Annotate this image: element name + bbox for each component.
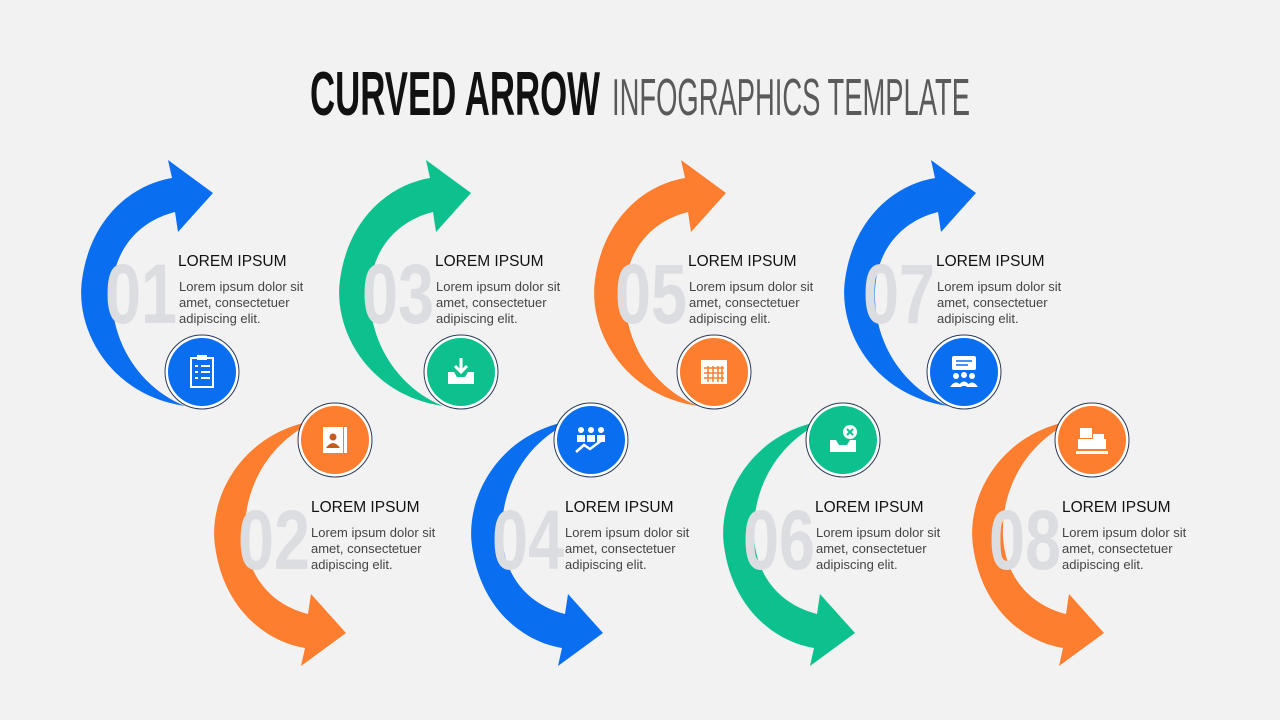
step 08 text (989, 493, 1187, 587)
icon 04: team growth (554, 403, 628, 477)
step 06 text: amet, consectetuer (816, 541, 927, 556)
step 01 text: adipiscing elit. (179, 311, 261, 326)
step 02 text: 02 (238, 493, 310, 587)
step 03 text: 03 (362, 247, 434, 341)
step 08 text: 08 (989, 493, 1061, 587)
icon 03: download tray (424, 335, 498, 409)
arrow 02 (214, 420, 346, 666)
step 01 text (105, 247, 304, 341)
step 08 text: amet, consectetuer (1062, 541, 1173, 556)
step 08 text: LOREM IPSUM (1062, 499, 1171, 516)
icon 08: cash register (1055, 403, 1129, 477)
arrow 07 (844, 160, 976, 406)
step 01 text: amet, consectetuer (179, 295, 290, 310)
step 03 text: Lorem ipsum dolor sit (436, 279, 561, 294)
icon 01: clipboard (165, 335, 239, 409)
step 06 text: LOREM IPSUM (815, 499, 924, 516)
step 02 text: amet, consectetuer (311, 541, 422, 556)
step 04 text: LOREM IPSUM (565, 499, 674, 516)
icon 02: contact book (298, 403, 372, 477)
step 04 text (492, 493, 690, 587)
step 03 text (362, 247, 561, 341)
step 02 text: Lorem ipsum dolor sit (311, 525, 436, 540)
step 02 text (238, 493, 436, 587)
arrow 08 (972, 420, 1104, 666)
step 06 text: adipiscing elit. (816, 557, 898, 572)
arrow 04 (471, 420, 603, 666)
icon 06: inbox cancel (806, 403, 880, 477)
step 05 text: adipiscing elit. (689, 311, 771, 326)
step 03 text: adipiscing elit. (436, 311, 518, 326)
step 05 text: Lorem ipsum dolor sit (689, 279, 814, 294)
step 03 text: amet, consectetuer (436, 295, 547, 310)
step 04 text: amet, consectetuer (565, 541, 676, 556)
step 01 text: Lorem ipsum dolor sit (179, 279, 304, 294)
step 05 text: LOREM IPSUM (688, 253, 797, 270)
arrow 03 (339, 160, 471, 406)
icon 07: meeting (927, 335, 1001, 409)
step 04 text: adipiscing elit. (565, 557, 647, 572)
step 07 text: amet, consectetuer (937, 295, 1048, 310)
arrow 06 (723, 420, 855, 666)
step 05 text: 05 (615, 247, 687, 341)
step 02 text: LOREM IPSUM (311, 499, 420, 516)
arrow 01 (81, 160, 213, 406)
step 03 text: LOREM IPSUM (435, 253, 544, 270)
step 04 text: 04 (492, 493, 564, 587)
step 07 text: adipiscing elit. (937, 311, 1019, 326)
step 02 text: adipiscing elit. (311, 557, 393, 572)
step 05 text: amet, consectetuer (689, 295, 800, 310)
step 08 text: Lorem ipsum dolor sit (1062, 525, 1187, 540)
title: INFOGRAPHICS TEMPLATE (612, 69, 970, 127)
step 06 text: Lorem ipsum dolor sit (816, 525, 941, 540)
step 06 text (743, 493, 941, 587)
step 07 text: 07 (863, 247, 935, 341)
step 01 text: LOREM IPSUM (178, 253, 287, 270)
step 06 text: 06 (743, 493, 815, 587)
step 07 text (863, 247, 1062, 341)
step 05 text (615, 247, 814, 341)
icon 05: calendar (677, 335, 751, 409)
step 07 text: LOREM IPSUM (936, 253, 1045, 270)
arrow 05 (594, 160, 726, 406)
title: CURVED ARROW (310, 60, 600, 129)
step 07 text: Lorem ipsum dolor sit (937, 279, 1062, 294)
step 01 text: 01 (105, 247, 177, 341)
step 08 text: adipiscing elit. (1062, 557, 1144, 572)
step 04 text: Lorem ipsum dolor sit (565, 525, 690, 540)
